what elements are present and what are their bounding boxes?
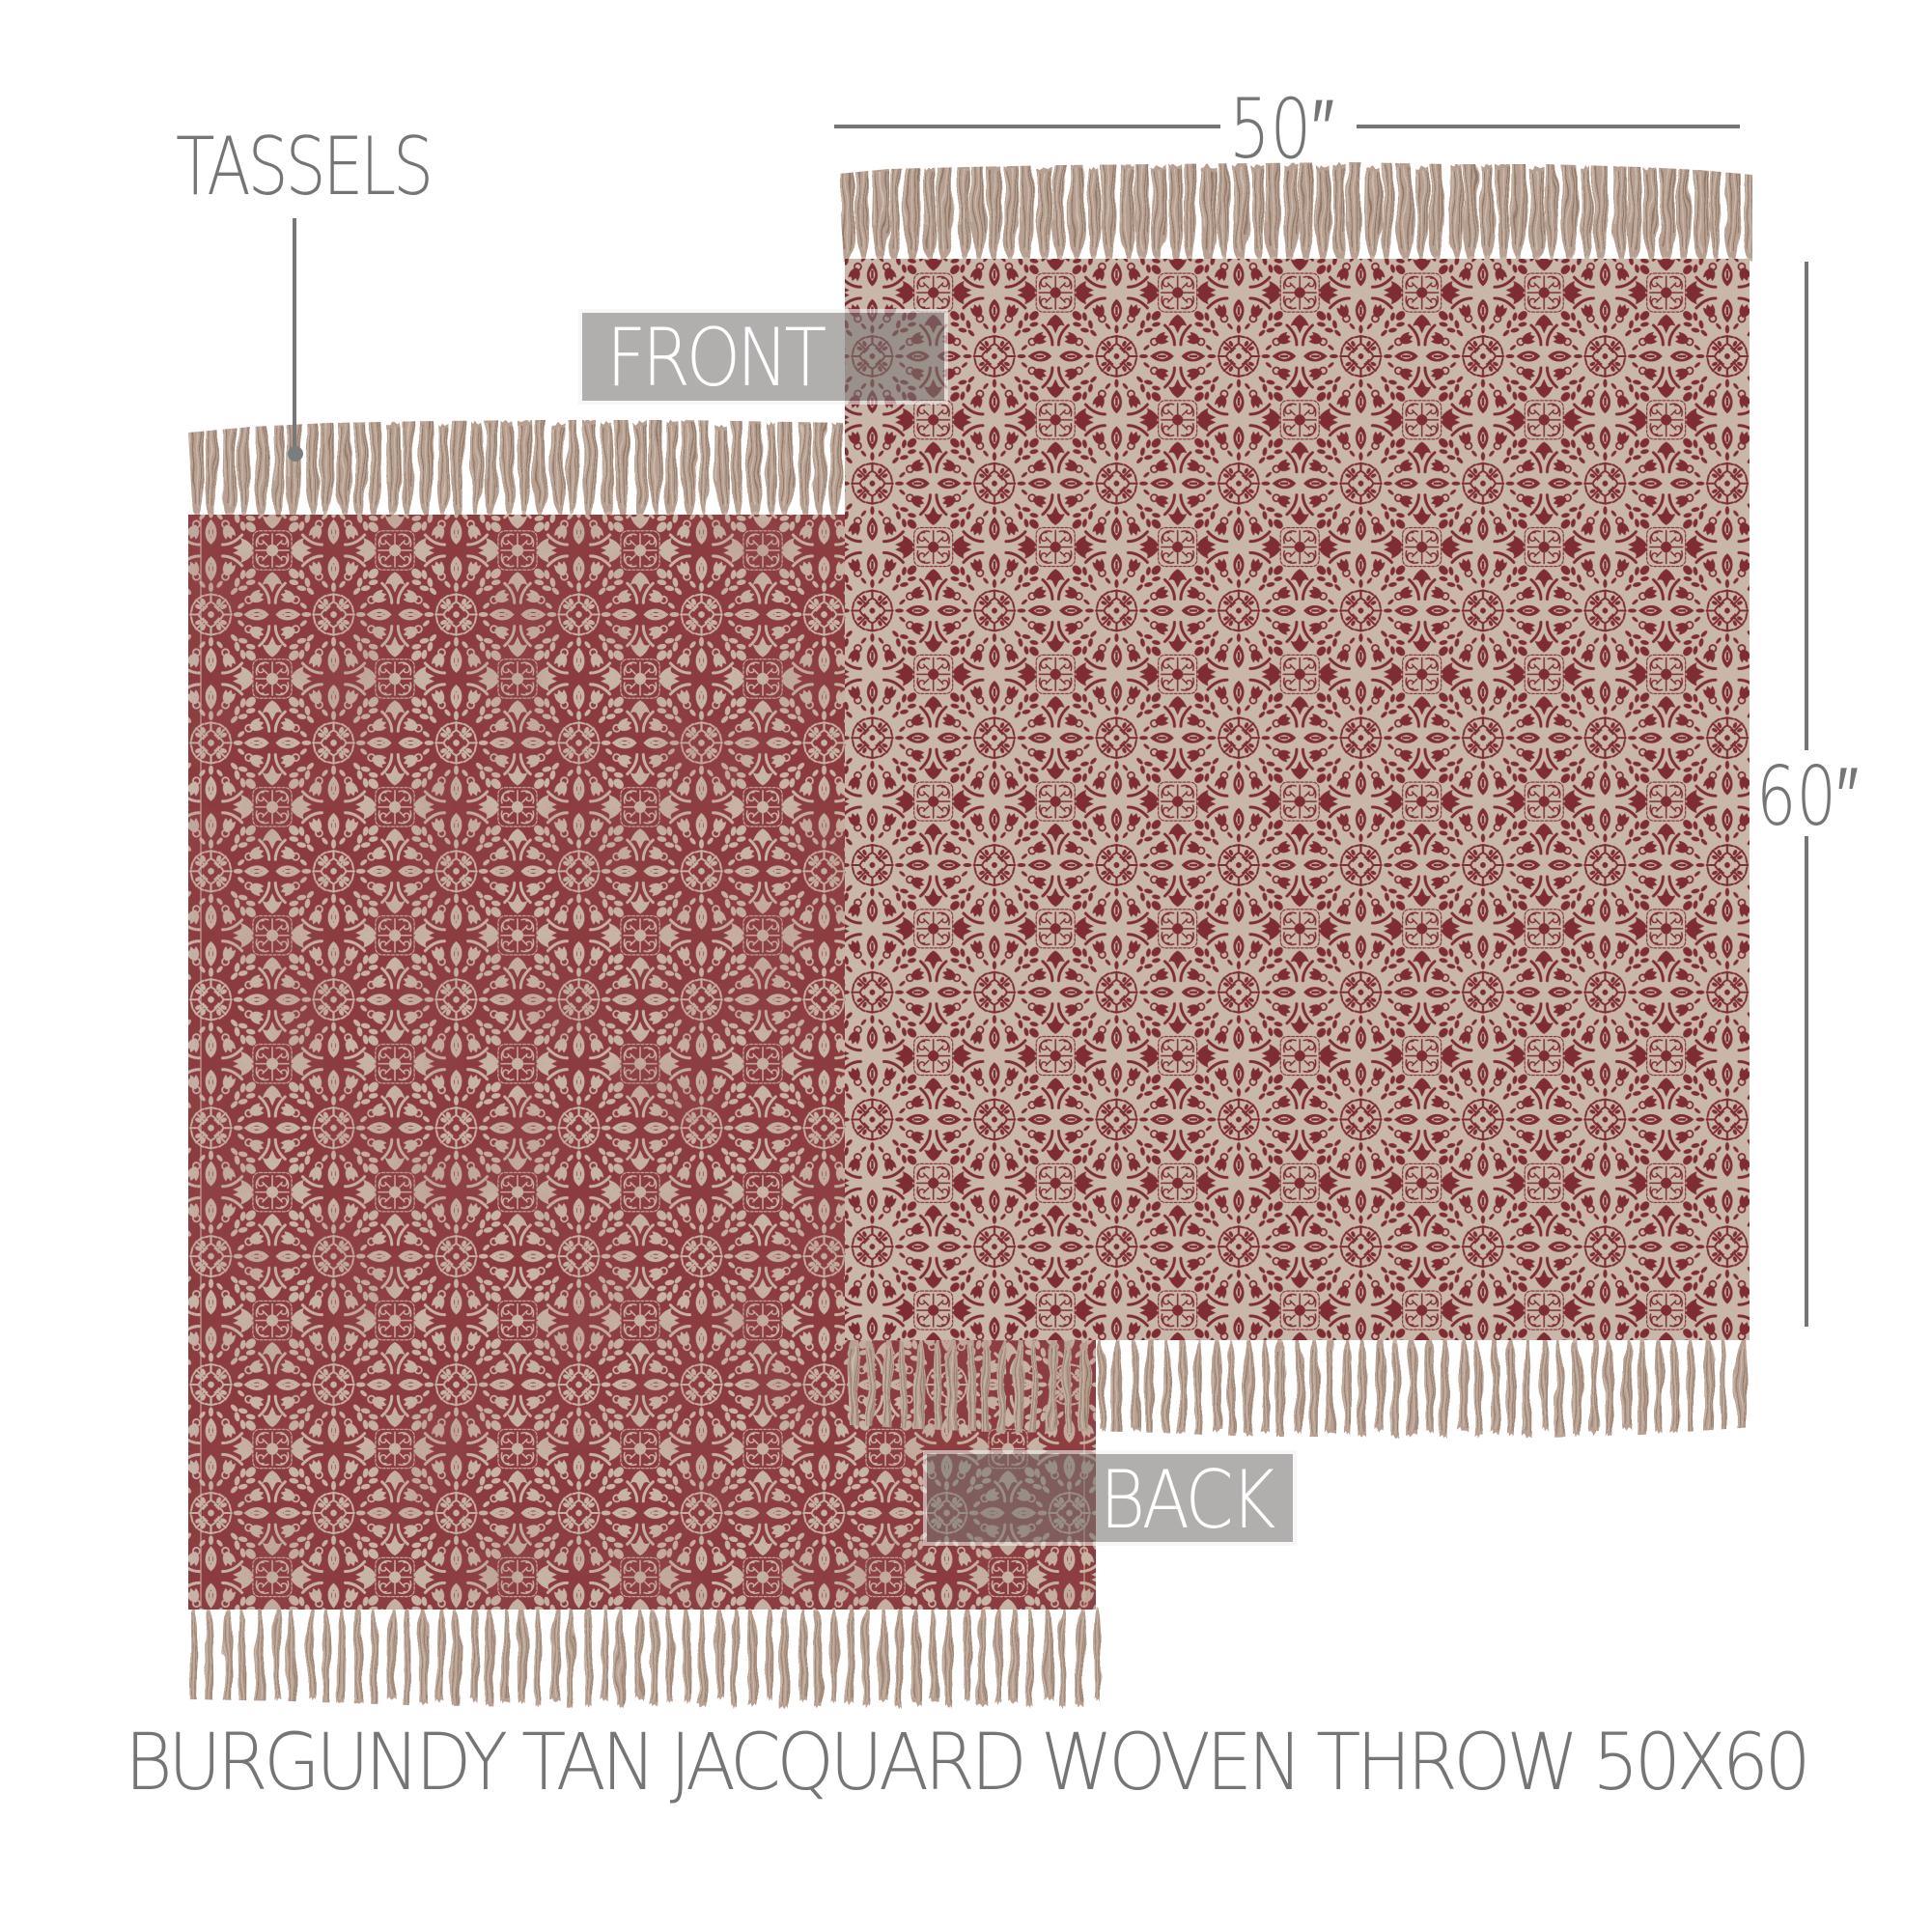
front top tassels [840, 162, 1752, 262]
panel: back side of throw [174, 410, 1120, 1714]
label: front [580, 311, 946, 405]
label: front: FRONT [606, 311, 826, 405]
front fabric tan jacquard [845, 259, 1750, 1340]
panel: front side of throw [826, 154, 1767, 1443]
dimension: height 60 inches [1756, 262, 1859, 1327]
dimension: height 60 inches: 60″ [1756, 749, 1859, 845]
dimension: width 50 inches: 50″ [1229, 81, 1334, 178]
title: BURGUNDY TAN JACQUARD WOVEN THROW 50X60 [125, 1718, 1806, 1808]
label: back [925, 1452, 1295, 1547]
back bottom tassels [189, 1607, 1103, 1709]
dimension: width 50 inches [834, 81, 1740, 178]
back top tassels [188, 420, 845, 515]
back fabric burgundy jacquard [188, 515, 1096, 1610]
callout: tassels [176, 120, 431, 462]
callout: tassels: TASSELS [176, 120, 431, 213]
label: back: BACK [1100, 1453, 1275, 1547]
front bottom tassels [848, 1340, 1749, 1439]
